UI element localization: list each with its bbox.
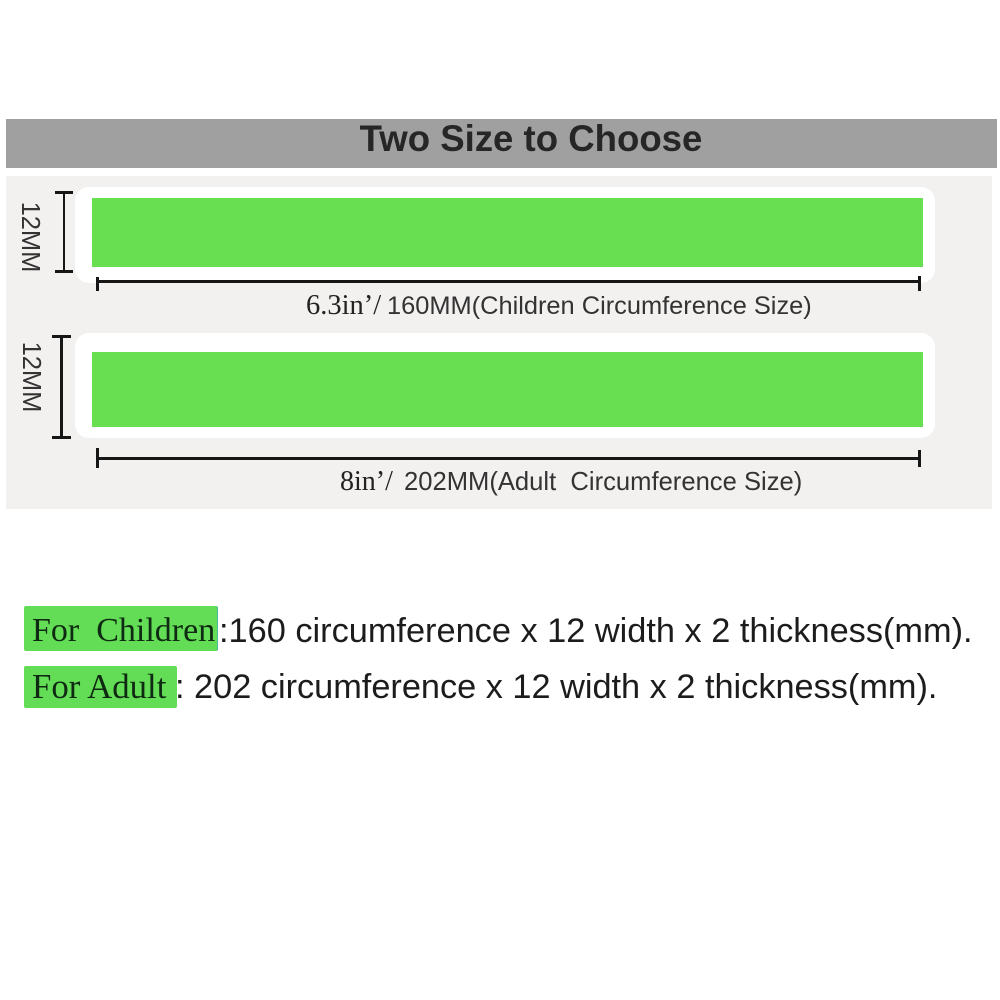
panel: size diagrams xyxy=(6,176,992,509)
adult spec line xyxy=(24,666,937,708)
adult width label: 202MM(Adult Circumference Size) xyxy=(404,468,802,496)
children dimensions: :160 circumference x 12 width x 2 thickness(mm). xyxy=(219,612,973,650)
title banner xyxy=(6,119,997,168)
child band backing xyxy=(75,187,935,283)
adult width label: 8in’/ xyxy=(340,466,393,497)
child width marker xyxy=(96,276,921,291)
child width label: 160MM(Children Circumference Size) xyxy=(387,292,812,320)
adult green band xyxy=(92,352,923,427)
adult highlight tag: For Adult xyxy=(32,667,166,706)
adult height marker xyxy=(52,335,71,439)
child width label: 6.3in’/ xyxy=(306,290,381,321)
child height marker xyxy=(55,191,73,273)
adult height label: 12MM xyxy=(17,342,45,412)
child green band xyxy=(92,198,923,267)
adult band backing xyxy=(75,333,935,438)
child height label: 12MM xyxy=(16,202,44,272)
title: Two Size to Choose xyxy=(360,118,702,159)
adult width marker xyxy=(96,448,921,468)
children spec line xyxy=(24,606,973,651)
adult dimensions: : 202 circumference x 12 width x 2 thickness(mm). xyxy=(175,668,937,706)
children highlight tag: For Children xyxy=(32,612,215,649)
